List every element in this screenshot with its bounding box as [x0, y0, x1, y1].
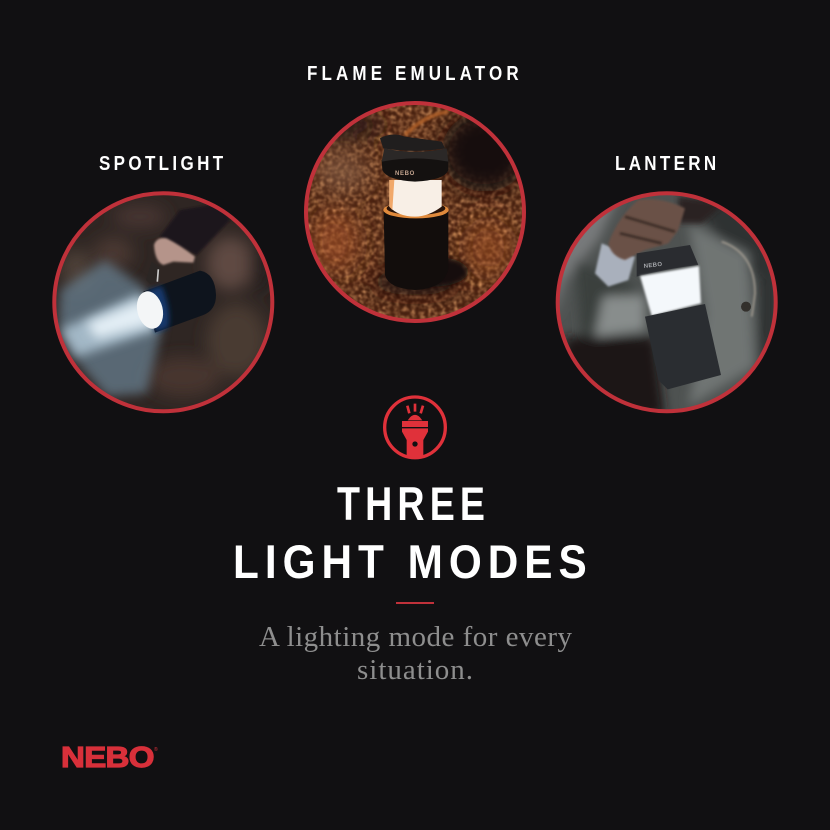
circle rings [54, 103, 776, 411]
sleeve [160, 203, 230, 255]
subtitle: A lighting mode for every [259, 621, 572, 653]
lantern base [645, 304, 721, 389]
photo circle: lantern [560, 195, 774, 410]
lantern cap [637, 245, 698, 277]
logo: NEBO: NEBO [61, 741, 154, 774]
label: spotlight: SPOTLIGHT [99, 152, 224, 174]
title: THREE [337, 478, 485, 531]
hand [154, 238, 195, 265]
cap [382, 156, 448, 182]
divider [396, 602, 434, 604]
label: flame emulator: FLAME EMULATOR [307, 62, 519, 84]
photo circle: lantern: NEBO [644, 262, 663, 270]
shirt cuff [595, 243, 635, 287]
glow ring [383, 204, 449, 218]
title [233, 478, 587, 589]
flashlight body [143, 271, 216, 333]
base [384, 212, 448, 290]
title: LIGHT MODES [233, 537, 587, 589]
hand [608, 199, 685, 260]
label: lantern: LANTERN [615, 152, 716, 174]
shadow [428, 254, 472, 290]
photo circle: flame emulator [308, 105, 522, 319]
subtitle: situation. [357, 654, 473, 686]
rope [405, 112, 448, 135]
light [640, 266, 701, 316]
light beam haze [58, 260, 162, 397]
lens [136, 291, 164, 329]
logo: NEBO: ® [154, 746, 158, 753]
icon: flashlight badge [385, 397, 445, 458]
photo circle: flame emulator: NEBO [395, 171, 415, 177]
subtitle [259, 621, 572, 686]
photo circle: spotlight [56, 195, 270, 410]
diffuser [389, 180, 442, 217]
